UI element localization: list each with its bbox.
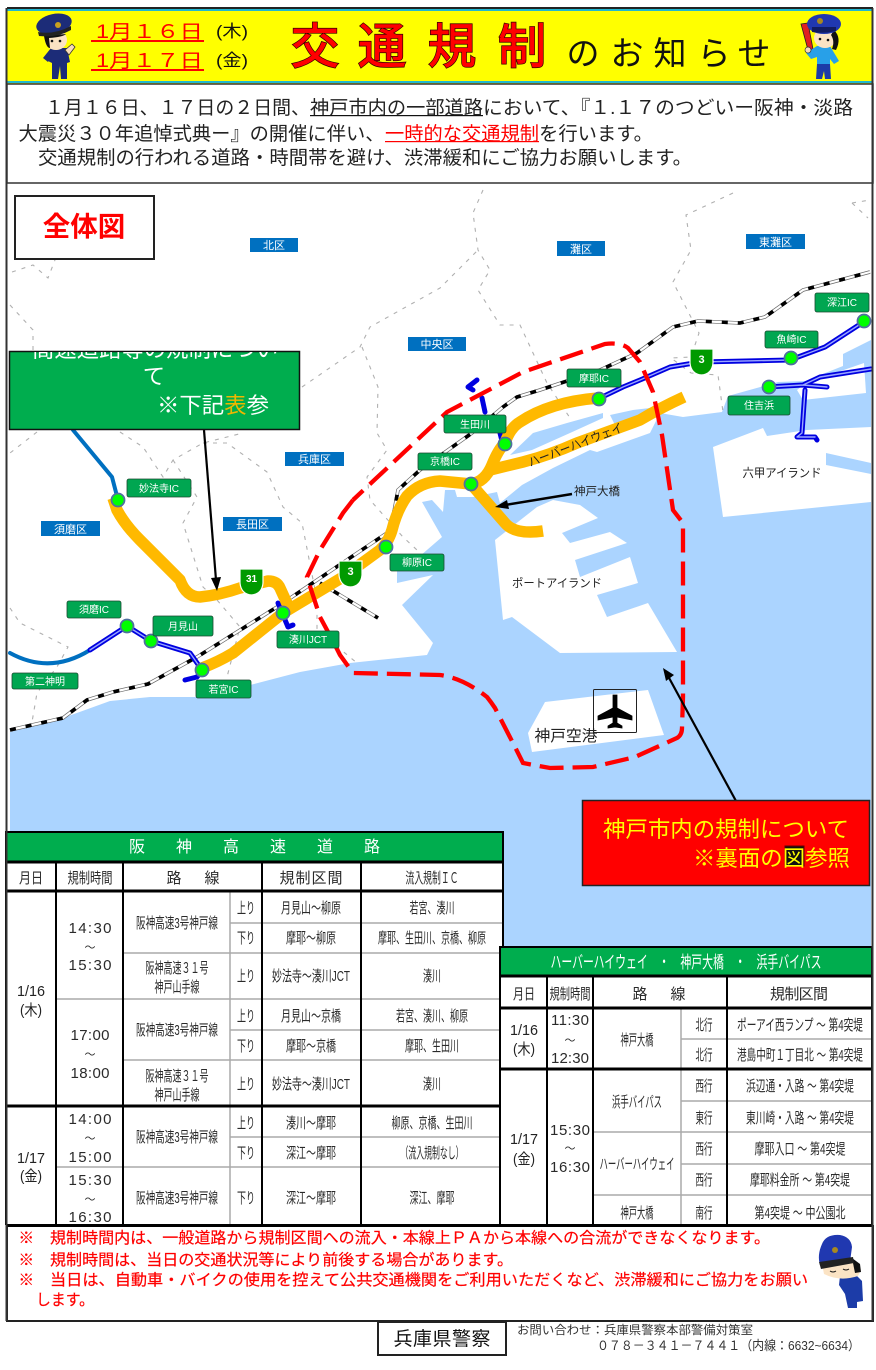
interchange labels: 生田川 (460, 418, 490, 431)
inner harbor water (510, 408, 650, 455)
time slots: 18:00 (70, 1065, 110, 1082)
interchange labels: 須磨IC (79, 603, 109, 616)
interchange labels: 魚崎IC (776, 333, 806, 346)
directions: 南行 (696, 1205, 712, 1222)
directions: 上り (237, 1076, 255, 1093)
callout: expressway restrictions: て (143, 364, 165, 389)
place names: 神戸大橋 (574, 484, 620, 498)
inflow restricted interchanges (378, 900, 486, 1207)
label: Hyogo Prefectural Police: 兵庫県警察 (394, 1328, 490, 1350)
column headings: 流入規制ＩＣ (406, 870, 458, 887)
directions: 北行 (696, 1047, 712, 1064)
time slots: ～ (564, 1143, 576, 1155)
title: のお知らせ: のお知らせ (566, 35, 770, 72)
routes: 阪神高速３１号 (146, 1068, 208, 1085)
arrow: to Route 31 (204, 430, 221, 591)
note 1: 規制時間内は、一般道路から規制区間への流入・本線上ＰＡから本線への合流ができなくなります。 (50, 1229, 770, 1247)
time slots: 15:00 (68, 1149, 112, 1166)
place names: ポートアイランド (512, 577, 602, 590)
ward labels: 北区 (263, 239, 285, 252)
inflow restricted interchanges: 柳原、京橋、生田川 (392, 1115, 472, 1132)
routes: 神戸山手線 (154, 979, 200, 996)
red dashed restriction boundary (307, 344, 683, 768)
date 1/16 (91, 22, 248, 43)
inflow restricted interchanges: 湊川 (423, 1076, 441, 1093)
panel: title banner (7, 7, 873, 84)
date 1/16: 1月１６日 (96, 22, 203, 43)
sign: route 3 west (339, 561, 362, 587)
directions: 上り (237, 968, 255, 985)
directions: 東行 (696, 1110, 712, 1127)
column headings: 路線 (166, 870, 220, 887)
time slots: 12:30 (551, 1050, 589, 1067)
restricted sections: 摩耶～柳原 (286, 930, 336, 947)
routes: ハーバーハイウェイ (600, 1156, 674, 1173)
label: Hyogo Prefectural Police (378, 1322, 506, 1355)
time slots: 14:00 (68, 1111, 112, 1128)
directions: 下り (237, 1145, 255, 1162)
note 3: ※ (18, 1272, 34, 1289)
table grid (500, 947, 872, 1226)
dates: (金) (20, 1168, 42, 1185)
callout: expressway restrictions: 高速道路等の規制につい (32, 337, 278, 362)
text line 1: 神戸市内の一部道路 (310, 97, 483, 119)
title: 交通規制: 交通規制 (291, 21, 546, 74)
interchange labels: 若宮IC (208, 683, 238, 696)
interchange labels: 柳原IC (402, 556, 432, 569)
restricted sections: 湊川～摩耶 (286, 1115, 336, 1132)
text line 2: 一時的な交通規制 (385, 123, 539, 145)
arrow: to Kobe Ohashi (495, 494, 572, 509)
routes: 阪神高速3号神戸線 (136, 1129, 218, 1146)
routes: 阪神高速3号神戸線 (136, 1022, 218, 1039)
label: 全体図: 全体図 (43, 211, 125, 242)
inflow restricted interchanges: 若宮、湊川 (410, 900, 454, 917)
ward labels: 東灘区 (759, 235, 792, 249)
ward labels: 灘区 (570, 242, 592, 256)
table header bar (500, 947, 872, 976)
icon: bowing police officer (819, 1235, 863, 1308)
Rokko inlet (826, 453, 871, 474)
sign: route 3 east: 3 (698, 354, 705, 366)
panel: introduction text (7, 84, 873, 183)
table header bar: 阪神高速道路 (129, 838, 380, 856)
column headings: 規制区間 (770, 986, 828, 1003)
restricted sections: 月見山～柳原 (281, 900, 341, 917)
callout: expressway restrictions: 照 (22, 427, 44, 452)
text line 2: 大震災３０年追悼式典ー』の開催に伴い、 (18, 123, 385, 145)
routes: 神戸山手線 (154, 1087, 200, 1104)
note 3 (18, 1271, 808, 1309)
contact information: ０７８－３４１－７４４１（内線：6632~6634） (597, 1338, 860, 1353)
dates (510, 1022, 538, 1168)
icon: police officer saluting (34, 10, 75, 79)
directions: 下り (237, 1190, 255, 1207)
place names (512, 421, 822, 745)
column headings (19, 870, 458, 887)
place names: 六甲アイランド (742, 466, 822, 480)
routes: 神戸大橋 (620, 1032, 654, 1049)
interchange labels (12, 293, 869, 698)
table header bar (6, 832, 503, 862)
restricted sections: 深江～摩耶 (286, 1190, 336, 1207)
note 2: ※ (18, 1252, 34, 1269)
restricted sections: 摩耶～京橋 (286, 1038, 336, 1055)
table: Hanshin Expressway (6, 832, 503, 1226)
dates: (金) (513, 1151, 535, 1168)
note 3: 当日は、自動車・バイクの使用を控えて公共交通機関をご利用いただくなど、渋滞緩和にご協力をお願い (50, 1271, 808, 1289)
routes: 神戸大橋 (620, 1205, 654, 1222)
time slots: 15:30 (550, 1122, 590, 1139)
callout: expressway restrictions: ※下記表参 (157, 393, 269, 418)
text line 1 (45, 97, 853, 119)
column headings: 規制時間 (550, 986, 590, 1003)
inflow restricted interchanges: 摩耶、生田川 (405, 1038, 459, 1055)
sign: route 3 west: 3 (347, 566, 354, 578)
time slots: ～ (564, 1035, 576, 1047)
column headings: 月日 (19, 870, 43, 887)
callout: expressway restrictions (8, 350, 300, 430)
restricted sections (737, 1017, 863, 1222)
directions: 上り (237, 1115, 255, 1132)
time slots: 11:30 (551, 1012, 589, 1029)
time slots: ～ (84, 942, 96, 954)
inflow restricted interchanges: （流入規制なし） (400, 1145, 464, 1162)
dates: 1/17 (17, 1150, 45, 1167)
column headings: 月日 (513, 986, 535, 1003)
time slots: 17:00 (70, 1027, 110, 1044)
restricted sections: 妙法寺～湊川JCT (272, 968, 350, 985)
interchange labels: 湊川JCT (289, 633, 327, 646)
directions (696, 1017, 712, 1222)
sea (10, 340, 871, 1000)
restricted sections (272, 900, 350, 1207)
island: Rokko Island (713, 427, 871, 517)
directions: 北行 (696, 1017, 712, 1034)
routes: 阪神高速3号神戸線 (136, 915, 218, 932)
contact information: お問い合わせ：兵庫県警察本部警備対策室 (517, 1322, 753, 1337)
time slots (68, 920, 112, 1226)
directions: 上り (237, 900, 255, 917)
place names: 神戸空港 (534, 727, 598, 745)
time slots: ～ (84, 1194, 96, 1206)
table: Harbor Highway, Kobe Ohashi, Hamate Bypass (500, 947, 872, 1226)
dates: 1/16 (510, 1022, 538, 1039)
place names: ハーバーハイウェイ (526, 421, 625, 470)
ward labels: 兵庫区 (298, 452, 331, 466)
directions: 下り (237, 930, 255, 947)
title: 交通規制: 交通規制 (291, 21, 546, 74)
callout: Kobe city restrictions: 神戸市内の規制について (603, 817, 849, 842)
directions: 西行 (696, 1078, 712, 1095)
ward labels: 中央区 (420, 338, 454, 351)
inflow restricted interchanges: 深江、摩耶 (410, 1190, 454, 1207)
routes: 浜手バイパス (612, 1094, 662, 1111)
interchange labels: 摩耶IC (579, 373, 609, 385)
column headings: 路線 (632, 986, 686, 1003)
routes (600, 1032, 674, 1222)
directions (237, 900, 255, 1207)
note 2: 規制時間は、当日の交通状況等により前後する場合があります。 (50, 1251, 513, 1269)
time slots: ～ (84, 1049, 96, 1061)
text line 2: を行います。 (539, 123, 653, 145)
label: 全体図 (15, 196, 154, 259)
icon: airport (594, 690, 636, 732)
text line 3: 交通規制の行われる道路・時間帯を避け、渋滞緩和にご協力お願いします。 (38, 147, 692, 169)
ward labels: 須磨区 (54, 522, 87, 536)
column headings: 規制時間 (68, 870, 112, 887)
island: Uozaki reclaimed land (797, 363, 866, 400)
text line 1: １月１６日、１７日の２日間、 (45, 98, 310, 119)
time slots: 16:30 (550, 1159, 590, 1176)
contact information (517, 1322, 860, 1353)
expressway: non-restricted blue sections (10, 321, 871, 680)
interchange labels: 深江IC (827, 297, 857, 309)
note 3: します。 (36, 1291, 94, 1309)
time slots (550, 1012, 590, 1176)
icon: police officer with baton (801, 14, 841, 79)
island: Port Island (495, 500, 677, 653)
interchange markers (112, 314, 870, 676)
time slots: 15:30 (68, 1172, 112, 1189)
dates (17, 983, 45, 1185)
table grid (6, 832, 503, 1225)
interchange labels: 住吉浜 (744, 399, 774, 412)
interchange labels: 京橋IC (430, 455, 460, 468)
dates: 1/17 (510, 1131, 538, 1148)
interchange labels: 第二神明 (25, 675, 65, 688)
date 1/16: (木) (216, 22, 248, 41)
note 1: ※ (18, 1230, 34, 1247)
road signs (240, 349, 713, 595)
sign: route 31 (240, 569, 263, 595)
panel: overall map (8, 190, 872, 946)
sign: route 3 east (690, 349, 713, 375)
directions: 下り (237, 1038, 255, 1055)
directions: 西行 (696, 1172, 712, 1189)
date 1/17: 1月１７日 (96, 51, 203, 72)
callout: Kobe city restrictions (582, 800, 870, 886)
restricted sections: 妙法寺～湊川JCT (272, 1076, 350, 1093)
date 1/17: (金) (216, 51, 248, 70)
inflow restricted interchanges: 摩耶、生田川、京橋、柳原 (378, 930, 486, 947)
column headings (513, 986, 828, 1003)
routes (136, 915, 218, 1207)
panel: notes (6, 1224, 873, 1321)
dates: (木) (20, 1002, 42, 1019)
time slots: 14:30 (68, 920, 112, 937)
interchange labels: 妙法寺IC (139, 482, 179, 495)
text line 2 (18, 123, 653, 145)
callout: Kobe city restrictions: ※裏面の図参照 (693, 846, 850, 871)
routes: 阪神高速３１号 (146, 960, 208, 977)
ward labels: 長田区 (236, 518, 269, 531)
expressway: restricted yellow sections (113, 397, 684, 668)
time slots: 16:30 (68, 1209, 112, 1226)
directions: 上り (237, 1008, 255, 1025)
inflow restricted interchanges: 湊川 (423, 968, 441, 985)
island: Kobe Airport (528, 690, 664, 752)
time slots: ～ (84, 1133, 96, 1145)
restricted sections: 深江～摩耶 (286, 1145, 336, 1162)
railway line (10, 272, 870, 730)
text line 1: において、『１.１７のつどいー阪神・淡路 (483, 97, 853, 119)
routes: 阪神高速3号神戸線 (136, 1190, 218, 1207)
underline: 神戸市内の一部道路 (310, 115, 483, 116)
dates: 1/16 (17, 983, 45, 1000)
arrow: to Kobe city area (663, 668, 736, 801)
underline: 一時的な交通規制 (385, 141, 539, 142)
ward boundaries (10, 190, 870, 722)
dates: (木) (513, 1041, 535, 1058)
ward labels (41, 234, 805, 536)
inflow restricted interchanges: 若宮、湊川、柳原 (396, 1008, 468, 1025)
time slots: 15:30 (68, 957, 112, 974)
date 1/17 (91, 51, 248, 72)
restricted sections: 月見山～京橋 (281, 1008, 341, 1025)
sign: route 31: 31 (246, 574, 257, 585)
directions: 西行 (696, 1141, 712, 1158)
interchange labels: 月見山 (168, 621, 198, 633)
column headings: 規制区間 (280, 870, 342, 887)
